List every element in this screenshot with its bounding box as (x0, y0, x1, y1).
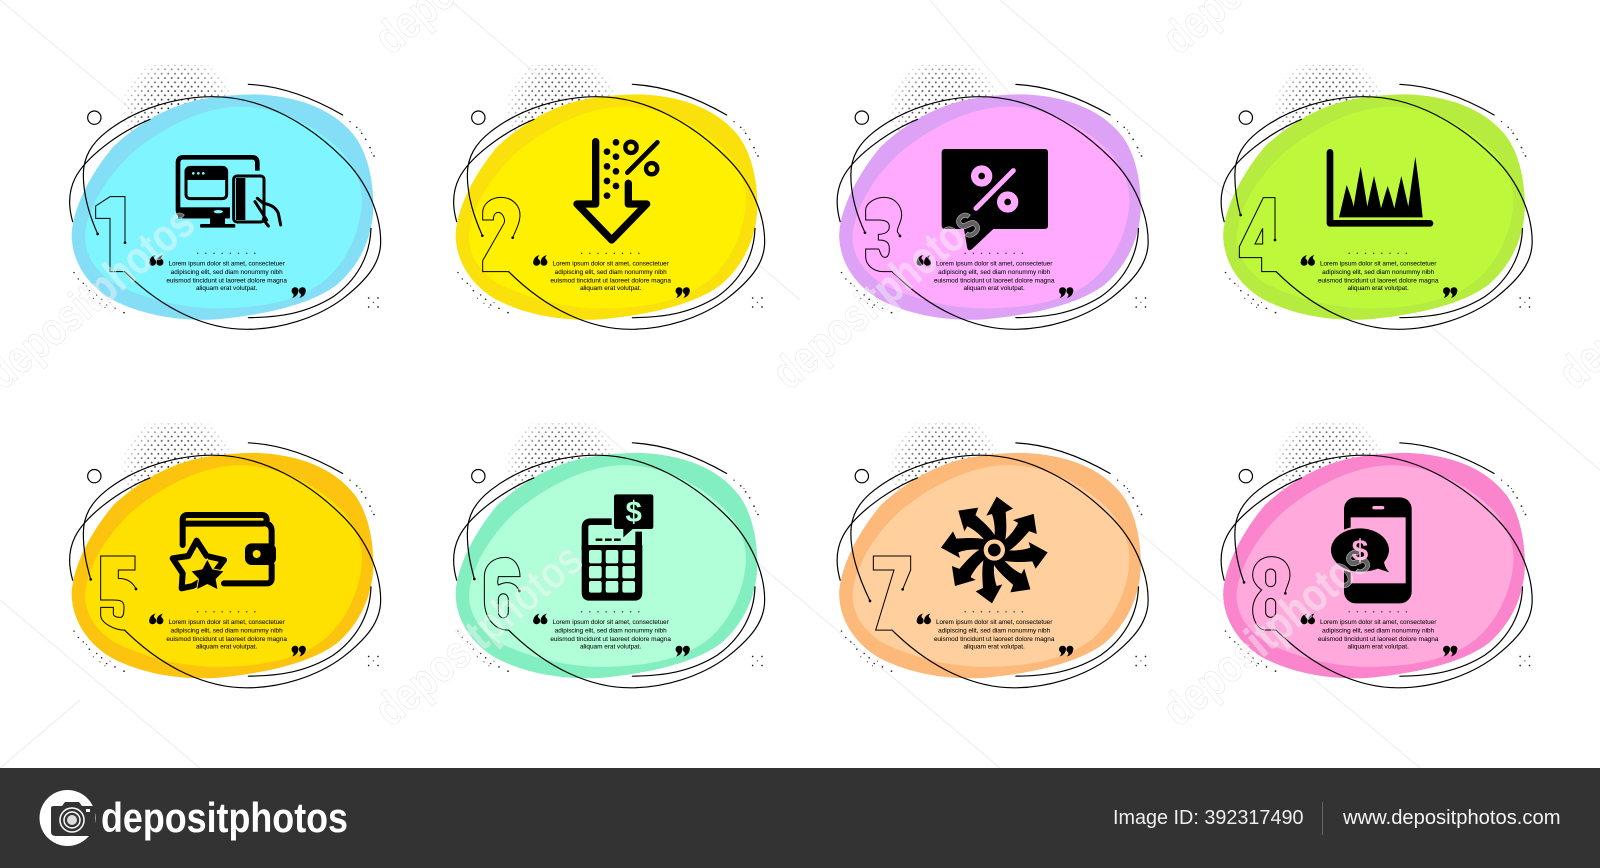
body text: Lorem ipsum dolor sit amet, consectetuer (936, 261, 1053, 268)
icon: monitor with card (178, 157, 281, 228)
blob background (72, 94, 373, 320)
panel 6: calculator with dollar bubble (454, 423, 765, 688)
panel 1: online card payment (70, 65, 381, 329)
dotted rule (581, 611, 639, 612)
outer line (70, 443, 371, 676)
dotted rule (197, 253, 255, 254)
panel 7: radial arrows (837, 423, 1148, 688)
quote marks (533, 613, 690, 656)
body text: adipiscing elit, sed diam nonummy nibh (555, 269, 667, 276)
icon: eight curved arrows (941, 497, 1048, 603)
body text: Lorem ipsum dolor sit amet, consectetuer (936, 619, 1053, 626)
main line (83, 455, 381, 688)
halftone dots (457, 423, 763, 672)
blob background (1223, 94, 1525, 320)
body text: adipiscing elit, sed diam nonummy nibh (938, 627, 1050, 634)
blob background (72, 453, 373, 678)
numeral 5 (89, 556, 137, 630)
main line (467, 97, 765, 329)
body text (166, 619, 287, 650)
dotted rule (964, 253, 1023, 254)
halftone dots (73, 65, 379, 314)
small circle (88, 469, 101, 483)
watermarks: depositphotos (1152, 533, 1380, 736)
main line (851, 455, 1148, 688)
body text: euismod tincidunt ut laoreet dolore magna (550, 636, 671, 643)
blob foreground (469, 107, 746, 308)
blob background (1223, 453, 1525, 678)
dotted rule (197, 611, 255, 612)
body text: Lorem ipsum dolor sit amet, consectetuer (1320, 619, 1437, 626)
icon: wallet and star (173, 515, 276, 589)
outer line (1221, 84, 1522, 318)
numeral 4 (1239, 198, 1276, 272)
halftone dots (457, 65, 763, 314)
body text: adipiscing elit, sed diam nonummy nibh (938, 269, 1050, 276)
quote marks (1301, 613, 1457, 656)
blob background (456, 453, 757, 678)
main line (1235, 97, 1532, 329)
body text: aliquam erat volutpat. (963, 285, 1025, 292)
main line (1235, 455, 1532, 688)
body text: adipiscing elit, sed diam nonummy nibh (555, 627, 667, 634)
small circle (855, 111, 868, 124)
blob foreground (1236, 465, 1513, 667)
blob foreground (852, 107, 1129, 308)
halftone dots (1225, 65, 1530, 314)
panel 2: percent down arrow (454, 65, 765, 329)
outer line (1221, 443, 1522, 676)
body text (1318, 261, 1439, 292)
outer line (70, 84, 371, 318)
quote marks (917, 613, 1073, 656)
panel 4: area chart (1221, 65, 1532, 329)
body text: euismod tincidunt ut laoreet dolore magna (1318, 277, 1439, 284)
watermarks: depositphotos (762, 196, 990, 399)
icon: calculator: $ (626, 496, 642, 529)
outer line (837, 84, 1138, 318)
body text: aliquam erat volutpat. (1347, 643, 1409, 650)
body text: aliquam erat volutpat. (580, 285, 641, 292)
body text: euismod tincidunt ut laoreet dolore magna (1318, 636, 1439, 643)
outer line (454, 84, 755, 318)
body text (550, 619, 671, 650)
icon: area chart (1330, 152, 1430, 223)
body text: aliquam erat volutpat. (1347, 285, 1409, 292)
panel 3: percent speech bubble (837, 65, 1148, 329)
main line (83, 97, 381, 329)
body text (934, 619, 1055, 650)
quote marks (149, 613, 306, 656)
numeral 2 (481, 197, 520, 272)
outer line (837, 443, 1138, 676)
numeral 1 (96, 197, 126, 272)
website: www.depositphotos.com (1342, 807, 1560, 829)
body text: Lorem ipsum dolor sit amet, consectetuer (552, 619, 669, 626)
numeral 3 (864, 197, 902, 272)
body text: Lorem ipsum dolor sit amet, consectetuer (552, 261, 669, 268)
dotted rule (964, 611, 1023, 612)
small circle (855, 469, 868, 483)
dotted rule (581, 253, 639, 254)
icon: phone with dollar bubble (1329, 497, 1412, 603)
quote marks (1301, 255, 1457, 298)
body text (166, 261, 287, 292)
body text: adipiscing elit, sed diam nonummy nibh (1322, 269, 1434, 276)
icon: calculator (582, 494, 653, 601)
body text: aliquam erat volutpat. (196, 285, 257, 292)
dotted rule (1348, 611, 1407, 612)
halftone dots (841, 423, 1146, 672)
body text: euismod tincidunt ut laoreet dolore magna (550, 277, 671, 284)
body text: aliquam erat volutpat. (963, 643, 1025, 650)
body text: aliquam erat volutpat. (580, 643, 641, 650)
body text: euismod tincidunt ut laoreet dolore magna (166, 277, 287, 284)
small circle (472, 469, 485, 483)
blob background (839, 453, 1141, 678)
body text (934, 261, 1055, 292)
icon: percent bubble (942, 149, 1048, 250)
blob background (456, 94, 757, 320)
watermarks: depositphotos (364, 533, 592, 736)
body text: Lorem ipsum dolor sit amet, consectetuer (1320, 261, 1437, 268)
logo wordmark: depositphotos (101, 794, 348, 841)
icon: phone with dollar bubble: $ (1352, 534, 1369, 567)
body text: adipiscing elit, sed diam nonummy nibh (171, 627, 283, 634)
blob foreground (1236, 107, 1513, 308)
panel 5: wallet with star (70, 423, 381, 688)
blob foreground (85, 107, 362, 308)
halftone dots (1225, 423, 1530, 672)
numeral 6 (473, 557, 521, 630)
icon: down arrow with percent (577, 139, 657, 240)
small circle (1239, 469, 1252, 483)
small circle (1239, 111, 1252, 124)
halftone dots (841, 65, 1146, 314)
blob background (839, 94, 1141, 320)
body text: Lorem ipsum dolor sit amet, consectetuer (168, 261, 285, 268)
image id: Image ID: 392317490 (1113, 807, 1304, 829)
body text: euismod tincidunt ut laoreet dolore magna (166, 636, 287, 643)
body text: adipiscing elit, sed diam nonummy nibh (171, 269, 283, 276)
body text: aliquam erat volutpat. (196, 643, 257, 650)
blob foreground (469, 465, 746, 667)
body text: Lorem ipsum dolor sit amet, consectetuer (168, 619, 285, 626)
blob foreground (85, 465, 362, 667)
body text (1318, 619, 1439, 650)
body text: euismod tincidunt ut laoreet dolore magna (934, 636, 1055, 643)
halftone dots (73, 423, 379, 672)
numeral 7 (869, 556, 911, 630)
dotted rule (1348, 253, 1407, 254)
panel 8: phone with dollar bubble (1221, 423, 1532, 688)
logo: camera badge (40, 790, 96, 846)
quote marks (917, 255, 1073, 298)
body text: adipiscing elit, sed diam nonummy nibh (1322, 627, 1434, 634)
main line (467, 455, 765, 688)
small circle (472, 111, 485, 124)
quote marks (533, 255, 690, 298)
footer bar (0, 768, 1600, 868)
body text: euismod tincidunt ut laoreet dolore magna (934, 277, 1055, 284)
blob foreground (852, 465, 1129, 667)
main line (851, 97, 1148, 329)
quote marks (149, 255, 306, 298)
body text (550, 261, 671, 292)
small circle (88, 111, 101, 124)
outer line (454, 443, 755, 676)
numeral 8 (1243, 557, 1290, 630)
